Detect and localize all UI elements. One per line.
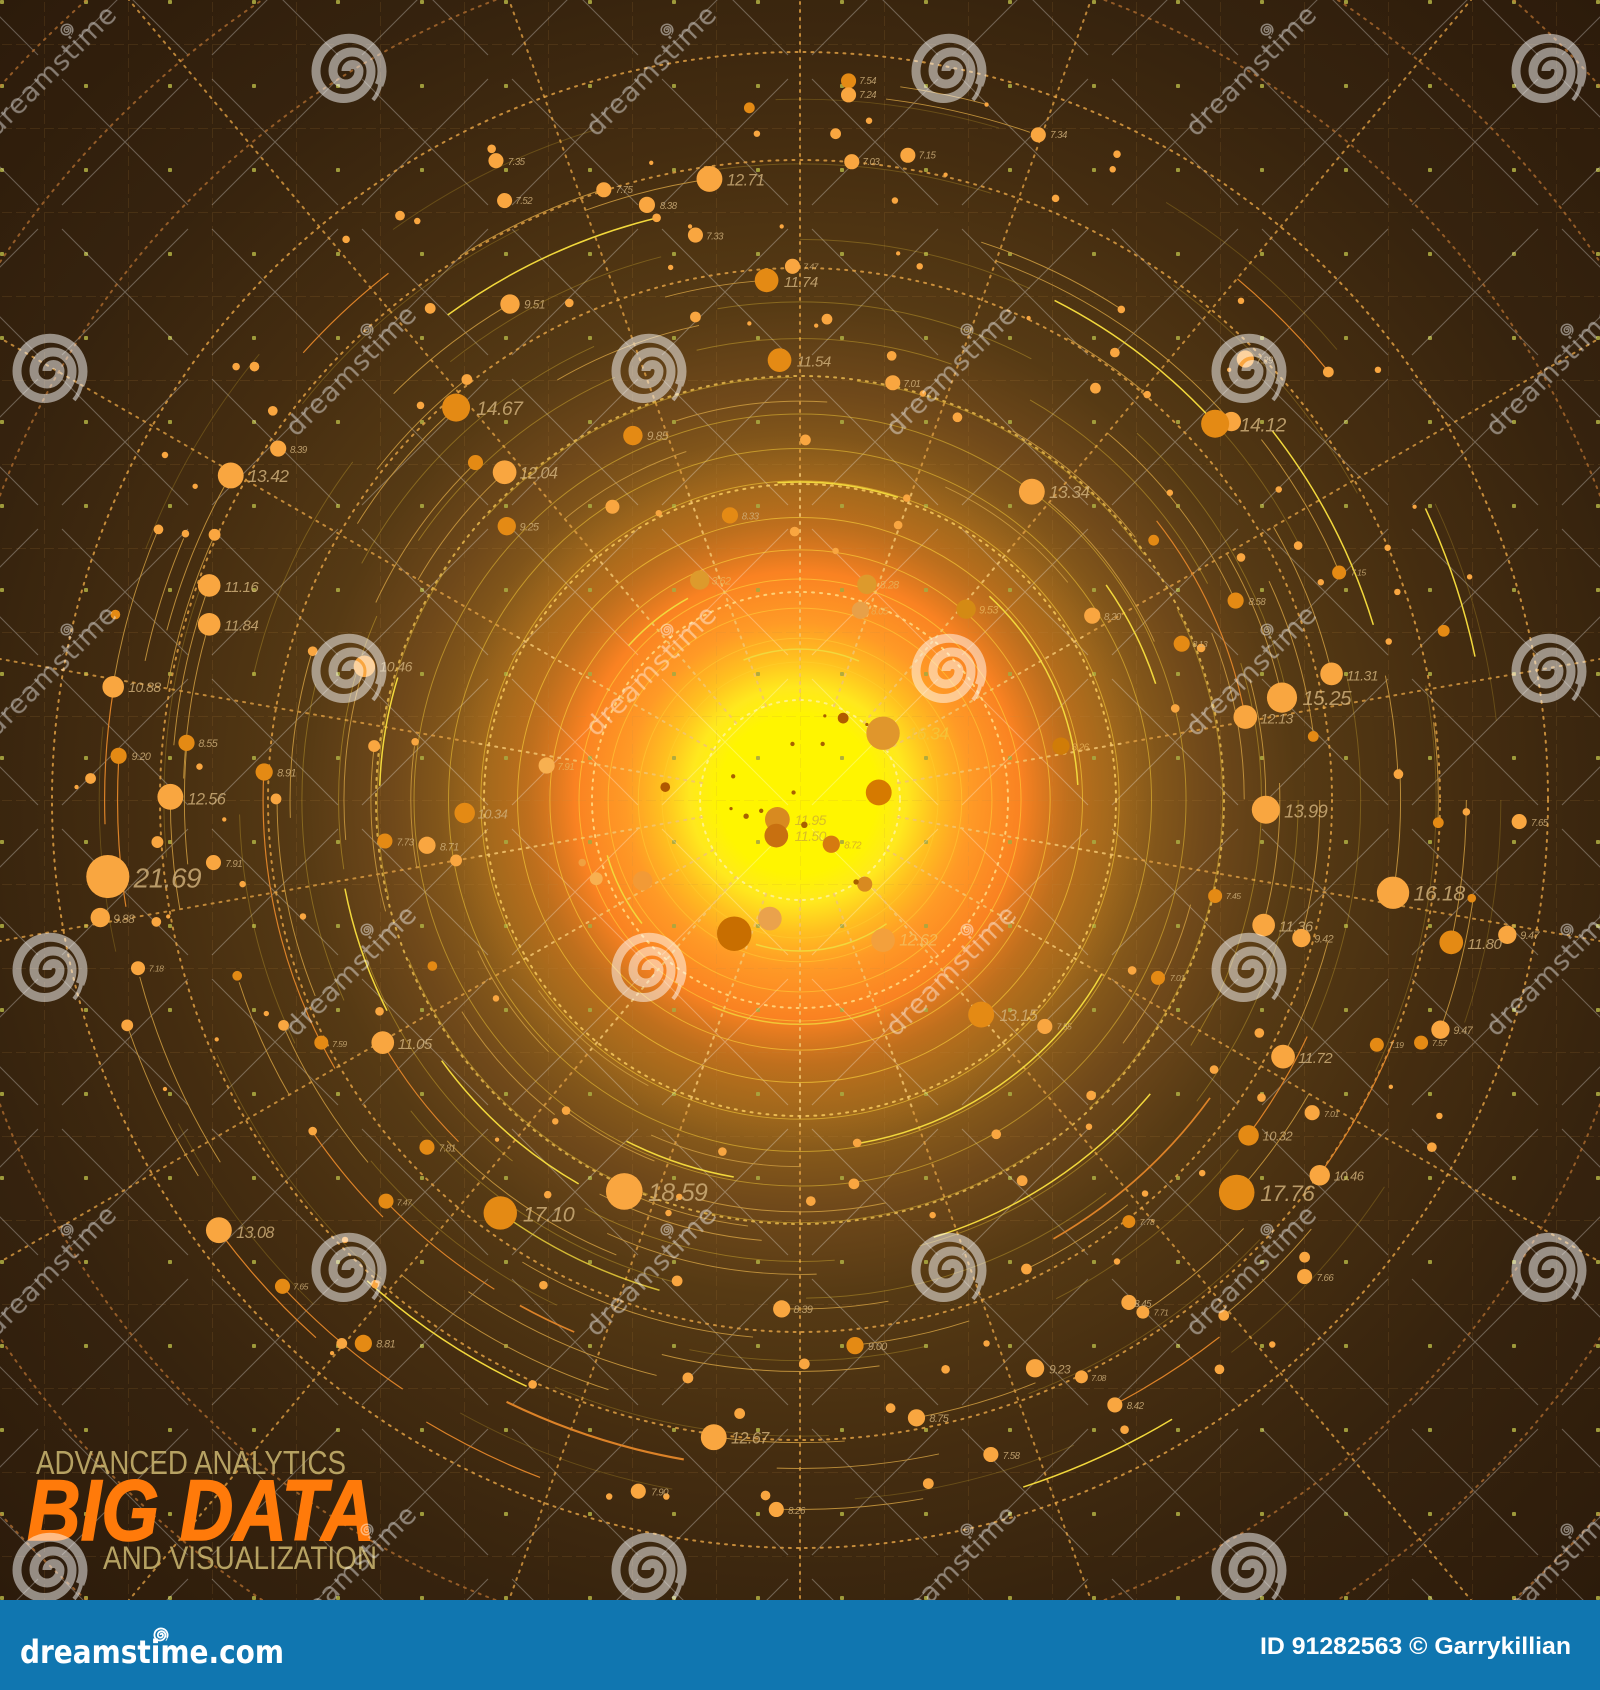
- data point 14.67: [442, 394, 524, 422]
- labelled data points: medium values: 8.33: [742, 512, 760, 523]
- watermark text: dreamstime: [279, 1499, 423, 1643]
- data field scaled to reference layout: [74, 73, 1549, 1526]
- watermark text: dreamstime: [579, 1199, 723, 1343]
- labelled data points: medium values: 11.31: [1347, 667, 1378, 683]
- data point 13.42: 13.42: [248, 466, 289, 486]
- labelled data points: medium values: 8.81: [376, 1339, 396, 1351]
- small unlabelled data dots: [74, 102, 1476, 1500]
- data point 15.25: [1267, 683, 1352, 713]
- data point 18.59: 18.59: [648, 1180, 708, 1207]
- watermark text: dreamstime: [879, 299, 1023, 443]
- labelled data points: medium values: 9.85: [647, 429, 669, 443]
- labelled data points: small values: 7.91: [225, 859, 242, 870]
- labelled data points: medium values: 8.91: [277, 767, 296, 779]
- data point 12.71: [697, 166, 764, 192]
- labelled data points: small values: 7.34: [1050, 130, 1068, 141]
- data point 12.13: 12.13: [1260, 710, 1294, 726]
- labelled data points: medium values: 11.05: [398, 1036, 433, 1053]
- footer logo text: dreamstime.com: [20, 1633, 284, 1671]
- labelled data points: small values: 7.54: [859, 76, 877, 87]
- watermark text: dreamstime: [279, 299, 423, 443]
- data point 12.13: [1233, 705, 1294, 729]
- labelled data points: medium values: 11.74: [784, 274, 818, 291]
- labelled data points: small values: 7.90: [651, 1487, 669, 1498]
- data point 14.12: [1201, 410, 1287, 438]
- comet trails: orange arcs: [74, 74, 1526, 1526]
- data point 12.56: [157, 784, 226, 810]
- labelled data points: medium values: 10.88: [128, 679, 161, 695]
- labelled data points: small values: 7.65: [293, 1282, 309, 1292]
- labelled data points: small values: 7.47: [803, 262, 820, 272]
- data points over the glow: 8.28: [880, 580, 899, 592]
- footer logo spiral: [154, 1628, 168, 1641]
- labelled data points: medium values: 10.46: [380, 659, 413, 675]
- labelled data points: small values: 7.19: [1389, 1040, 1404, 1050]
- data point 17.10: [484, 1196, 575, 1230]
- labelled data points: small values: 7.75: [616, 185, 634, 196]
- labelled data points: medium values: 8.20: [1104, 612, 1122, 623]
- labelled data points: small values: 8.13: [1192, 639, 1208, 649]
- watermark text: dreamstime: [1179, 1199, 1323, 1343]
- watermark text: dreamstime: [1179, 599, 1323, 743]
- labelled data points: medium values: 11.84: [224, 618, 258, 635]
- labelled data points: medium values: 8.39: [290, 445, 308, 456]
- labelled data points: medium values: 7.29: [1256, 355, 1274, 366]
- labelled data points: large values: [86, 166, 1465, 1450]
- data point 13.34: 13.34: [1049, 482, 1090, 502]
- labelled data points: small values: 7.73: [397, 837, 415, 848]
- data point 12.04: 12.04: [520, 465, 558, 483]
- data point 16.18: 16.18: [1414, 880, 1465, 905]
- labelled data points: small values: 7.01: [1170, 973, 1185, 983]
- data point 13.99: 13.99: [1284, 800, 1328, 821]
- labelled data points: medium values: 8.58: [1249, 597, 1266, 608]
- labelled data points: medium values: 8.75: [929, 1413, 950, 1425]
- data point 12.67: [701, 1424, 770, 1450]
- data point 16.18: [1377, 877, 1465, 909]
- data point 12.04: [493, 460, 558, 484]
- labelled data points: medium values: 9.88: [113, 912, 135, 926]
- labelled data points: small values: 7.66: [1316, 1273, 1334, 1284]
- data points over the glow: 8.26: [1072, 742, 1090, 753]
- watermark text: dreamstime: [579, 599, 723, 743]
- labelled data points: medium values: 9.20: [132, 751, 151, 763]
- labelled data points: medium values: 10.32: [1263, 1129, 1293, 1144]
- labelled data points: medium values: 9.51: [524, 297, 545, 311]
- data point 17.10: 17.10: [523, 1202, 575, 1227]
- heading: big data: BIG DATA: [27, 1463, 375, 1559]
- labelled data points: small values: 7.15: [1351, 568, 1366, 578]
- data point 14.67: 14.67: [477, 398, 524, 420]
- central glow: yellow core and orange halo: [438, 435, 1158, 1155]
- labelled data points: medium values: 10.34: [478, 806, 508, 821]
- data points over the glow: 16.34: [908, 724, 948, 744]
- data point 12.56: 12.56: [188, 790, 226, 808]
- data point 12.71: 12.71: [727, 171, 764, 189]
- labelled data points: medium values: [91, 197, 1541, 1517]
- title block: [27, 1444, 377, 1576]
- data point 13.99: [1252, 796, 1328, 824]
- labelled data points: medium values: 11.16: [224, 579, 259, 596]
- data point 21.69: [86, 855, 201, 898]
- labelled data points: medium values: 8.71: [440, 842, 459, 854]
- heading: advanced analytics: ADVANCED ANALYTICS: [36, 1444, 346, 1481]
- labelled data points: medium values: 9.23: [1049, 1363, 1071, 1377]
- data point 17.76: [1219, 1175, 1315, 1210]
- labelled data points: medium values: 9.47: [1453, 1025, 1474, 1037]
- labelled data points: medium values: 8.38: [660, 201, 678, 212]
- watermark text: dreamstime: [279, 899, 423, 1043]
- labelled data points: small values: 7.58: [1003, 1451, 1021, 1462]
- data points over the glow: 8.72: [844, 841, 862, 852]
- data points over the glow: 9.53: [979, 604, 998, 616]
- data points over the glow: 11.95: [795, 812, 827, 828]
- comet trails: bright yellow arcs: [78, 78, 1522, 1522]
- labelled data points: medium values: 11.36: [1279, 919, 1314, 936]
- labelled data points: small values: 7.01: [1324, 1109, 1339, 1119]
- data point 13.08: 13.08: [236, 1224, 274, 1242]
- data point 13.08: [206, 1217, 274, 1243]
- labelled data points: medium values: 8.42: [1127, 1401, 1145, 1412]
- data points over the glow: 11.50: [795, 828, 827, 844]
- data points over the glow: [539, 570, 1090, 952]
- labelled data points: medium values: 8.26: [788, 1506, 806, 1517]
- labelled data points: small values: 7.08: [1091, 1373, 1106, 1383]
- labelled data points: small values: 7.52: [515, 196, 533, 207]
- labelled data points: small values: 7.33: [706, 231, 724, 242]
- data point 13.42: [218, 463, 289, 488]
- labelled data points: small values: 7.24: [859, 90, 877, 101]
- labelled data points: medium values: 9.00: [868, 1341, 887, 1353]
- data point 14.12: 14.12: [1240, 414, 1287, 436]
- data point 13.15: 13.15: [999, 1007, 1039, 1025]
- labelled data points: small values: 7.45: [1226, 891, 1241, 901]
- data points over the glow: 3.62: [712, 575, 731, 587]
- labelled data points: small values: 7.57: [1432, 1038, 1448, 1048]
- heading: and visualization: AND VISUALIZATION: [103, 1540, 377, 1576]
- watermark text: dreamstime: [879, 899, 1023, 1043]
- concentric thin rings: [99, 99, 1501, 1501]
- labelled data points: medium values: 9.42: [1314, 933, 1334, 945]
- data points over the glow: 8.05: [871, 607, 889, 618]
- data points over the glow: 12.62: [899, 932, 938, 950]
- data point 18.59: [606, 1173, 708, 1210]
- labelled data points: small values: 7.35: [508, 157, 526, 168]
- labelled data points: small values: 7.47: [397, 1197, 413, 1207]
- labelled data points: small values: [131, 73, 1549, 1499]
- labelled data points: medium values: 8.55: [198, 738, 219, 750]
- labelled data points: small values: 7.78: [1140, 1217, 1155, 1227]
- data point 15.25: 15.25: [1302, 687, 1352, 710]
- labelled data points: small values: 7.15: [919, 150, 936, 161]
- footer bar: [0, 1600, 1600, 1690]
- watermark text: dreamstime: [579, 0, 723, 143]
- watermark text: dreamstime: [879, 1499, 1023, 1643]
- labelled data points: medium values: 8.39: [794, 1304, 813, 1316]
- labelled data points: small values: 7.81: [439, 1144, 456, 1155]
- labelled data points: medium values: 11.72: [1298, 1050, 1333, 1067]
- labelled data points: medium values: 10.46: [1334, 1169, 1365, 1184]
- labelled data points: small values: 7.59: [332, 1039, 347, 1049]
- data point 13.34: [1019, 479, 1090, 505]
- watermark text: dreamstime: [1179, 0, 1323, 143]
- labelled data points: small values: 7.18: [149, 963, 164, 973]
- labelled data points: small values: 7.55: [1057, 1022, 1072, 1032]
- labelled data points: medium values: 11.54: [797, 354, 831, 371]
- comet trails: faint tan arcs: [80, 80, 1520, 1520]
- labelled data points: small values: 7.01: [904, 379, 920, 390]
- data point 13.15: [968, 1002, 1039, 1028]
- labelled data points: medium values: 9.25: [520, 521, 540, 533]
- data point 17.76: 17.76: [1260, 1181, 1315, 1206]
- labelled data points: medium values: 11.80: [1467, 936, 1503, 953]
- labelled data points: small values: 8.45: [1134, 1299, 1152, 1310]
- labelled data points: medium values: 9.47: [1520, 930, 1541, 942]
- labelled data points: small values: 7.03: [863, 157, 880, 168]
- data points over the glow: 7.91: [557, 762, 574, 773]
- data point 21.69: 21.69: [133, 862, 201, 893]
- data point 12.67: 12.67: [731, 1430, 770, 1448]
- labelled data points: small values: 7.65: [1531, 818, 1549, 829]
- footer image id and credit: ID 91282563 © Garrykillian: [1260, 1633, 1571, 1660]
- labelled data points: small values: 7.71: [1154, 1307, 1169, 1317]
